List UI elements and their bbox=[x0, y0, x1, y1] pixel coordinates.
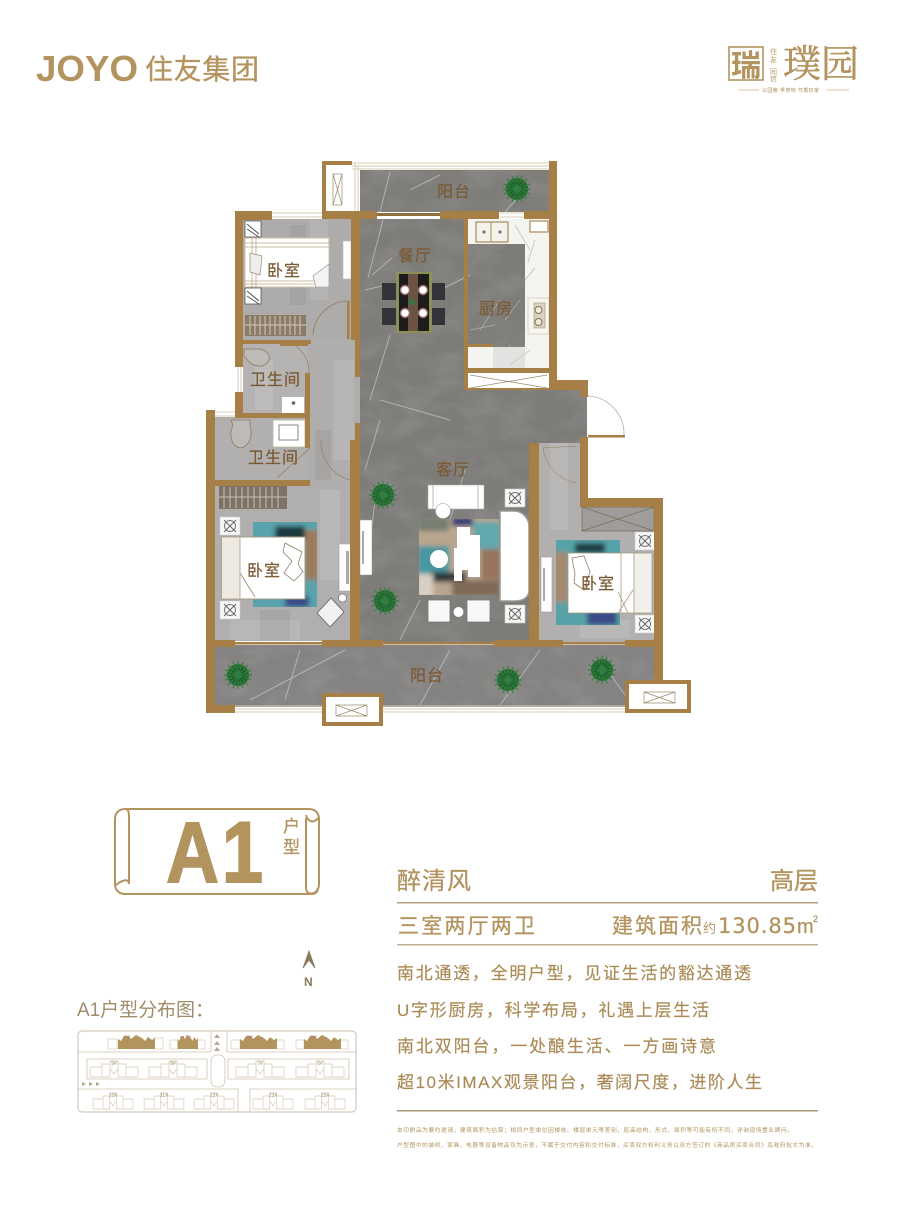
building numbers: 13# bbox=[269, 1093, 277, 1099]
rug bbox=[556, 540, 620, 625]
divider and disclaimer bbox=[397, 1110, 818, 1149]
building numbers: 11# bbox=[160, 1093, 168, 1099]
selling points: 南北通透，全明户型，见证生活的豁达通透 bbox=[397, 964, 751, 983]
building numbers: 10# bbox=[109, 1093, 117, 1099]
building numbers bbox=[109, 1035, 329, 1099]
room labels: 厨房 bbox=[479, 300, 513, 318]
room layout and area: 130.85 bbox=[718, 914, 796, 938]
logo: JOYO 住友集团: JOYO bbox=[36, 48, 138, 89]
logo: JOYO 住友集团 bbox=[36, 48, 259, 89]
upper bedroom furniture bbox=[245, 221, 351, 339]
logo: 璞园: 住 bbox=[770, 47, 777, 56]
bathroom fixtures bbox=[231, 340, 350, 480]
kitchen counter bbox=[468, 219, 549, 368]
room layout and area: 约 bbox=[703, 921, 716, 936]
selling points: U字形厨房，科学布局，礼遇上层生活 bbox=[397, 1001, 709, 1020]
selling points: 超10米IMAX观景阳台，奢阔尺度，进阶人生 bbox=[397, 1073, 762, 1092]
logo: 璞园: 友 bbox=[770, 55, 777, 64]
shaft box: bottom bbox=[324, 695, 381, 724]
room layout and area: 三室两厅两卫 bbox=[398, 915, 535, 938]
dining set bbox=[382, 272, 445, 333]
building numbers: 3# bbox=[247, 1035, 253, 1041]
marble veins bbox=[250, 172, 625, 705]
rug bbox=[253, 522, 317, 607]
shaft box: top bbox=[327, 165, 352, 211]
shaft box: right bbox=[627, 682, 689, 711]
distribution map bbox=[78, 1031, 356, 1112]
room labels: 卧室 bbox=[581, 575, 615, 593]
gold A1 buildings bbox=[108, 1035, 348, 1049]
walls bbox=[206, 161, 663, 713]
floors bbox=[206, 161, 666, 721]
room layout and area: m bbox=[797, 916, 814, 938]
room labels: 卧室 bbox=[267, 262, 301, 280]
other buildings bbox=[90, 1061, 345, 1109]
building numbers: 7# bbox=[257, 1061, 263, 1067]
building numbers: 15# bbox=[321, 1093, 329, 1099]
sink bbox=[476, 222, 508, 242]
floor plan bbox=[206, 161, 689, 724]
style and tier headings: 醉清风 bbox=[397, 868, 471, 895]
logo: 璞园: 璞园 bbox=[783, 33, 859, 88]
stove bbox=[528, 298, 549, 334]
distribution map title: A1户型分布图： bbox=[77, 999, 214, 1021]
logo: 璞园: 信 bbox=[770, 74, 777, 83]
style and tier headings: 高层 bbox=[770, 868, 818, 895]
logo: 璞园: 同 bbox=[770, 68, 777, 76]
room layout and area: 2 bbox=[813, 914, 818, 924]
windows and railings bbox=[215, 163, 625, 712]
north arrow: N bbox=[304, 975, 313, 989]
entry door bbox=[588, 396, 624, 435]
building numbers: 9# bbox=[111, 1061, 117, 1067]
logo: 璞园: 公园旁·孚府地·节香玖家 bbox=[762, 87, 819, 94]
right bedroom furniture bbox=[541, 446, 655, 633]
building numbers: 12# bbox=[210, 1093, 218, 1099]
selling points bbox=[397, 964, 762, 1092]
room labels bbox=[247, 183, 615, 685]
building numbers: 5# bbox=[311, 1035, 317, 1041]
room labels: 卫生间 bbox=[248, 449, 299, 467]
logo: 璞园: 瑞 bbox=[731, 50, 761, 83]
building numbers: 1# bbox=[124, 1035, 130, 1041]
room labels: 阳台 bbox=[437, 183, 471, 201]
logo: 璞园 bbox=[729, 33, 859, 94]
style and tier headings bbox=[397, 868, 818, 904]
building numbers: 8# bbox=[170, 1061, 176, 1067]
north arrow bbox=[303, 951, 315, 989]
A1 scroll badge: A bbox=[166, 805, 219, 901]
room labels: 卫生间 bbox=[250, 371, 301, 389]
room layout and area bbox=[397, 914, 818, 946]
plants bbox=[224, 175, 616, 694]
living room furniture bbox=[360, 485, 529, 623]
A1 scroll badge: 户 bbox=[283, 817, 300, 836]
logo: JOYO 住友集团: 住友集团 bbox=[145, 54, 259, 85]
A1 scroll badge: 1 bbox=[222, 805, 263, 901]
kitchen shaft bbox=[468, 373, 549, 389]
room labels: 卧室 bbox=[247, 562, 281, 580]
selling points: 南北双阳台，一处酿生活、一方画诗意 bbox=[397, 1037, 716, 1056]
room labels: 客厅 bbox=[436, 461, 470, 479]
building numbers: 6# bbox=[317, 1061, 323, 1067]
rug bbox=[419, 519, 499, 595]
divider and disclaimer: 本印刷品为要约邀请，建筑面积为估算；相同户型单位因楼栋、楼层单元等差别，层高结构、形式、面积等可能有所不同，详询现场置业顾问。 bbox=[397, 1126, 793, 1134]
lower-left bedroom furniture bbox=[219, 486, 351, 627]
A1 scroll badge bbox=[115, 805, 319, 901]
corner cabinet bbox=[530, 221, 548, 232]
room labels: 阳台 bbox=[410, 667, 444, 685]
room labels: 餐厅 bbox=[398, 247, 432, 265]
A1 scroll badge: 型 bbox=[283, 838, 300, 857]
room layout and area: 建筑面积 bbox=[612, 915, 702, 938]
divider and disclaimer: 户型图中的装修、家具、电器等设备物品仅为示意，不属于交付内容和交付标准，买卖双方权利义务以双方签订的《商品房买卖合同》及政府批文为准。 bbox=[397, 1141, 817, 1149]
building numbers: 2# bbox=[185, 1035, 191, 1041]
